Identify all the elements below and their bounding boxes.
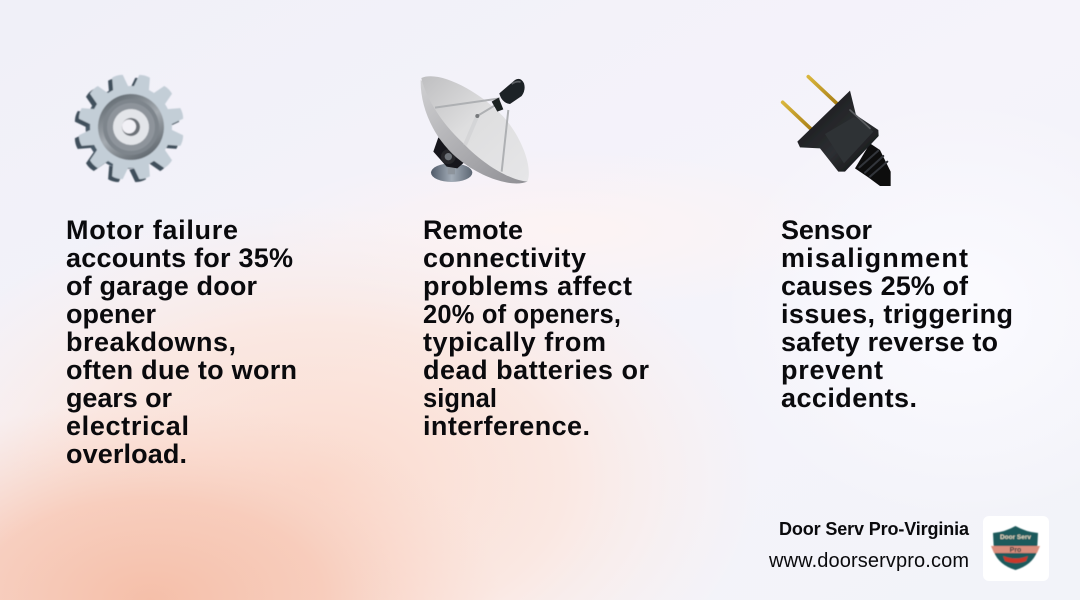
text: remote connectivity: interference. — [423, 411, 590, 441]
logo badge — [983, 516, 1049, 581]
text: sensor misalignment: issues, triggering — [781, 299, 1013, 329]
logo badge: Door Serv — [1000, 534, 1031, 541]
icon: power plug — [783, 77, 891, 186]
text: motor failure: breakdowns, — [66, 327, 236, 357]
text: motor failure: overload. — [66, 439, 187, 469]
icon: satellite dish — [421, 76, 529, 183]
text: remote connectivity — [423, 215, 649, 441]
text: motor failure: of garage door — [66, 271, 257, 301]
text: sensor misalignment: accidents. — [781, 383, 917, 413]
text: motor failure: accounts for 35% — [66, 243, 293, 273]
text: sensor misalignment: Sensor — [781, 215, 872, 245]
text: motor failure: Motor failure — [66, 215, 238, 245]
logo badge: Pro — [1010, 547, 1021, 554]
text: sensor misalignment: safety reverse to — [781, 327, 998, 357]
text: sensor misalignment: causes 25% of — [781, 271, 969, 301]
text: remote connectivity: signal — [423, 385, 497, 413]
text: remote connectivity: Remote — [423, 215, 523, 245]
text: motor failure: often due to worn — [66, 355, 297, 385]
text: remote connectivity: typically from — [423, 327, 606, 357]
footer: website: www.doorservpro.com — [768, 550, 969, 572]
text: motor failure: gears or — [66, 383, 172, 413]
text: remote connectivity: problems affect — [423, 271, 632, 301]
text: sensor misalignment: misalignment — [781, 243, 968, 273]
icon: gear — [62, 61, 196, 196]
text: remote connectivity: connectivity — [423, 243, 586, 273]
text: motor failure: opener — [66, 299, 156, 329]
text: sensor misalignment — [781, 215, 1013, 413]
text: sensor misalignment: prevent — [781, 355, 883, 385]
text: motor failure — [66, 215, 297, 469]
text: remote connectivity: dead batteries or — [423, 355, 649, 385]
text: motor failure: electrical — [66, 411, 189, 441]
text: remote connectivity: 20% of openers, — [423, 301, 621, 329]
footer: company name: Door Serv Pro-Virginia — [779, 519, 970, 539]
